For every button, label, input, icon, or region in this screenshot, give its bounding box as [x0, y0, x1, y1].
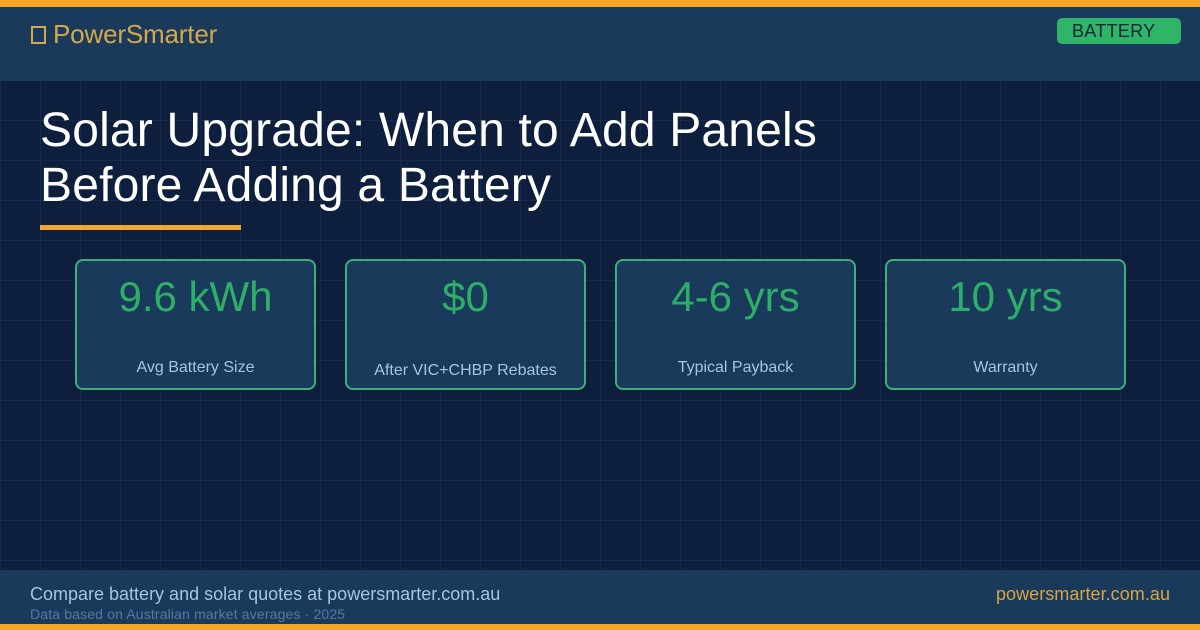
category badge [1057, 18, 1181, 44]
value: 9.6 kWh [118, 273, 273, 320]
title underline [40, 225, 241, 230]
top accent stripe [0, 0, 1200, 7]
website link: powersmarter.com.au [996, 584, 1170, 604]
stat card: warranty [885, 259, 1126, 390]
footer bar [0, 570, 1200, 630]
label: Avg Battery Size [136, 359, 254, 376]
stat card: price after rebates [345, 259, 586, 390]
value: $0 [442, 273, 489, 320]
badge label: BATTERY [1072, 21, 1155, 41]
bottom accent stripe [0, 624, 1200, 630]
title [40, 104, 817, 212]
icon: missing glyph box [31, 26, 46, 44]
title: Solar Upgrade: When to Add Panels [40, 104, 817, 157]
value: 10 yrs [948, 273, 1063, 320]
stat card: payback [615, 259, 856, 390]
title: Before Adding a Battery [40, 159, 551, 212]
header bar [0, 0, 1200, 81]
brand name: PowerSmarter [53, 19, 217, 49]
label: Warranty [973, 359, 1038, 376]
label: After VIC+CHBP Rebates [374, 362, 557, 379]
value: 4-6 yrs [671, 273, 800, 320]
data source note: Data based on Australian market averages · 2025 [30, 606, 345, 622]
stat card: battery size [75, 259, 316, 390]
call to action: Compare battery and solar quotes at powersmarter.com.au [30, 584, 500, 604]
label: Typical Payback [678, 359, 793, 376]
logo [31, 19, 217, 49]
